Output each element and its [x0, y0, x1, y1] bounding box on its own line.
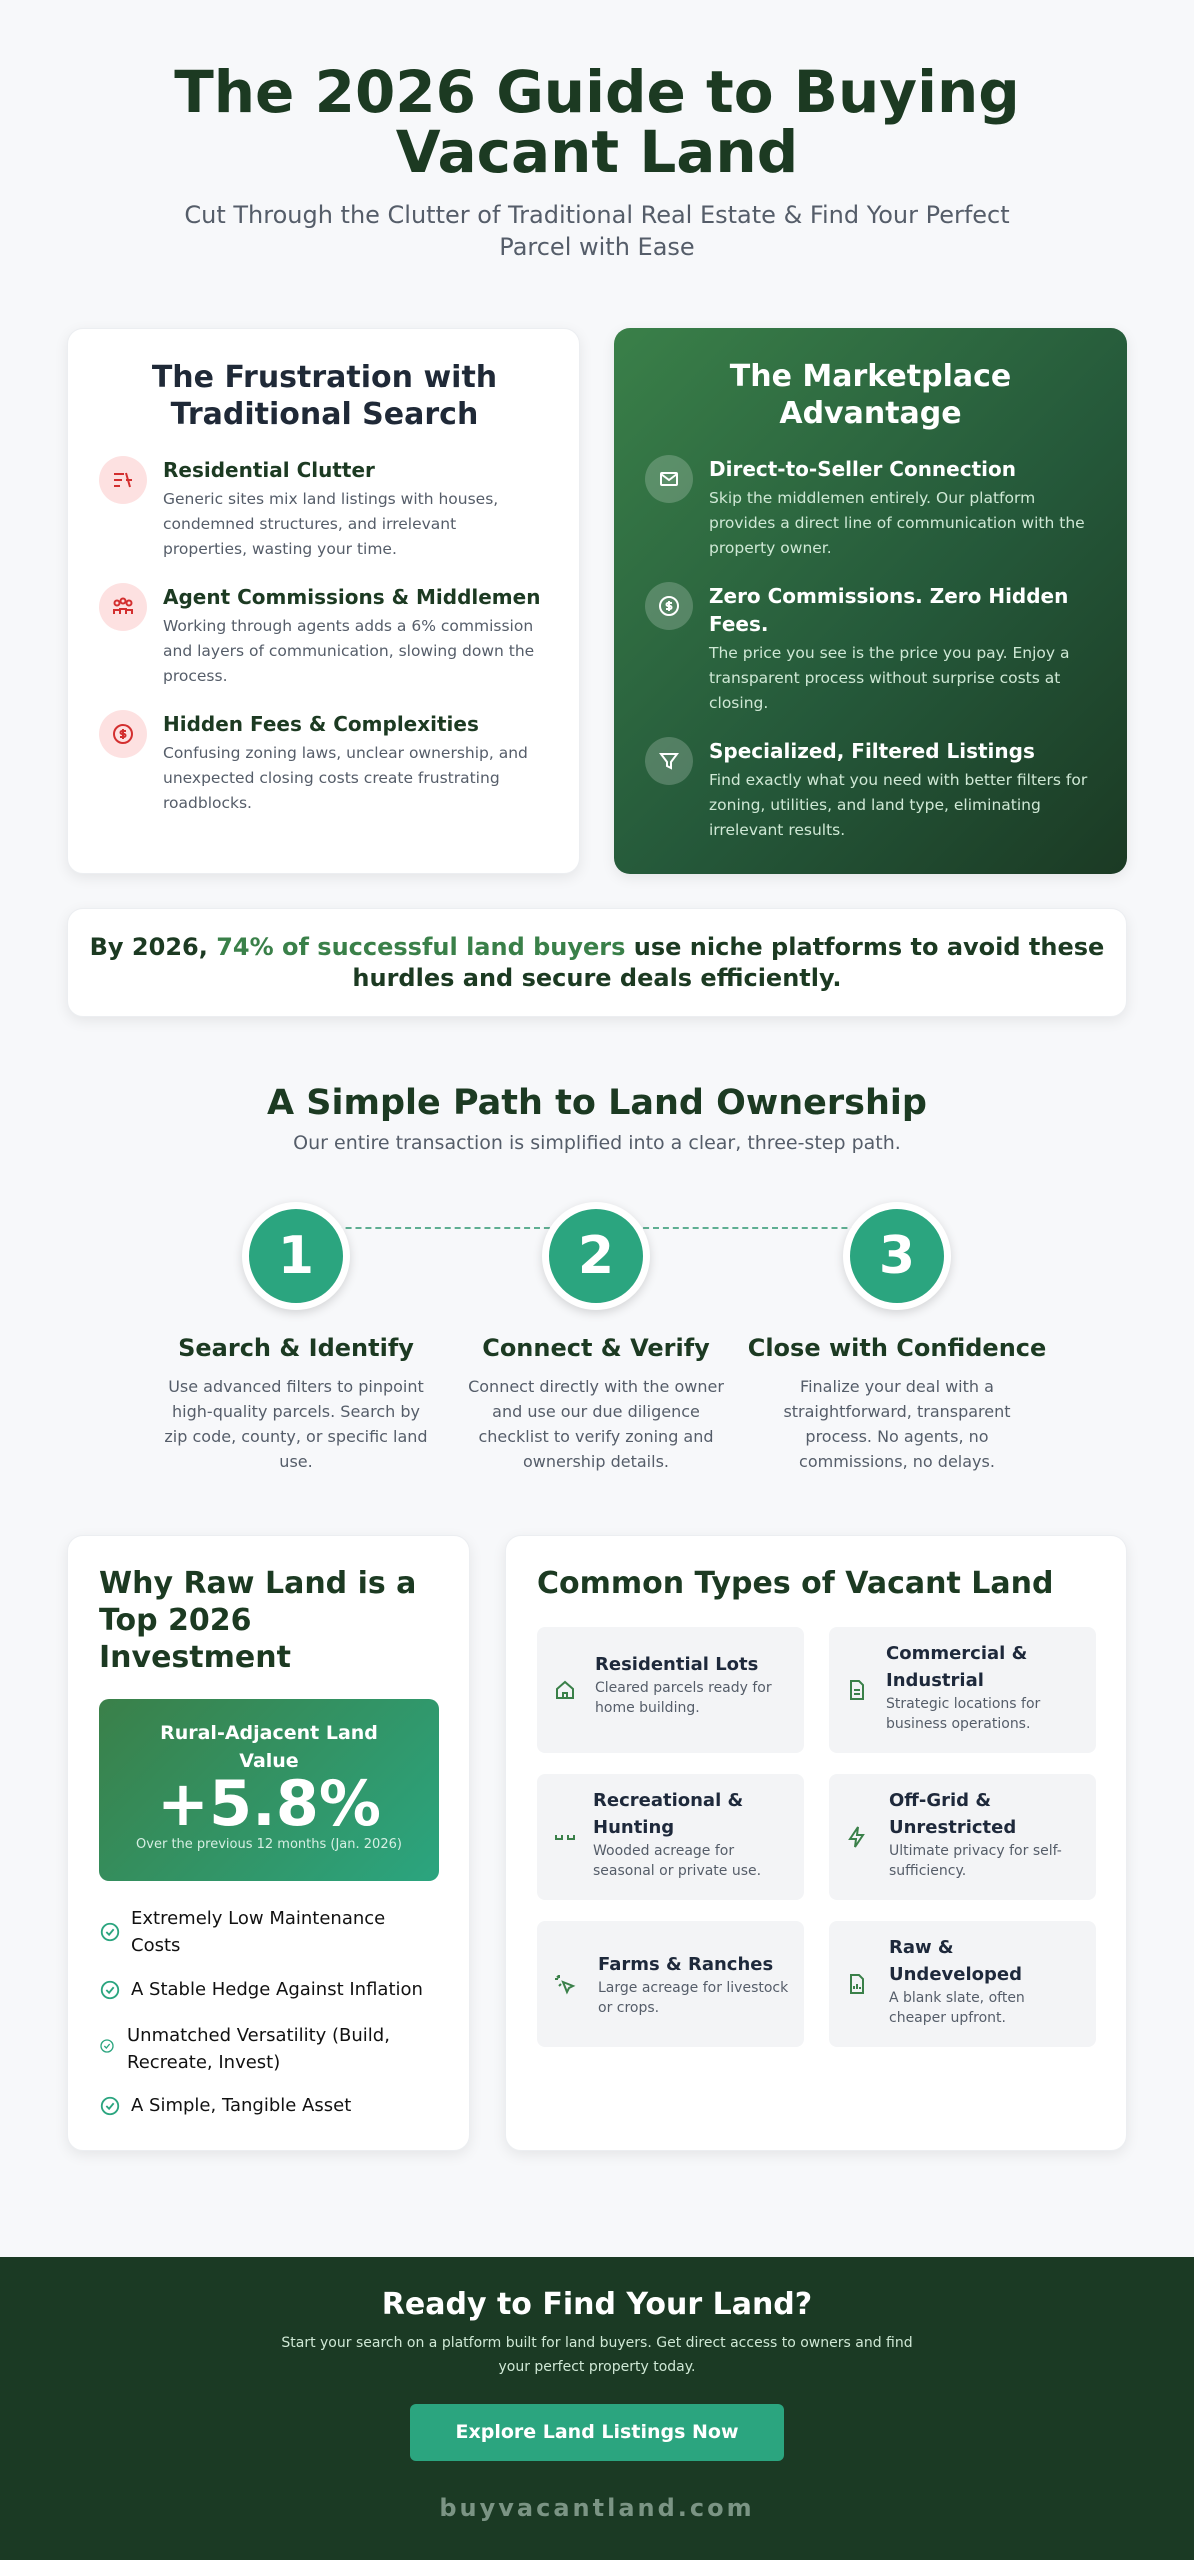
panel: marketplace advantage	[614, 328, 1127, 874]
title: The 2026 Guide to Buying	[174, 58, 1020, 126]
tile: off-grid	[829, 1774, 1096, 1900]
step 1	[164, 1202, 428, 1471]
heading: advantage: Advantage	[779, 396, 962, 431]
tile: off-grid: Unrestricted	[889, 1817, 1016, 1838]
panel: marketplace advantage: Specialized, Filtered Listings	[709, 739, 1035, 763]
text: Connect directly with the owner and use our due diligence checklist to verify zoning and ownership details.	[468, 1377, 724, 1471]
button: Explore Land Listings Now	[455, 2421, 739, 2443]
heading: advantage	[730, 359, 1011, 431]
panel: frustration: Confusing zoning laws, unclear ownership, and unexpected closing costs create frustrating roadblocks.	[163, 744, 528, 812]
callout: stat: By 2026, 74% of successful land buyers use niche platforms to avoid these hurdles and secure deals efficiently.	[90, 933, 1104, 992]
text: Finalize your deal with a straightforward, transparent process. No agents, no commissions, no delays.	[783, 1377, 1011, 1471]
tile: residential	[537, 1627, 804, 1753]
tile: commercial: business operations.	[886, 1716, 1030, 1732]
heading: frustration: Traditional Search	[171, 397, 478, 432]
stat box: +5.8%: Rural-Adjacent Land	[160, 1722, 378, 1744]
heading: advantage: The Marketplace	[730, 359, 1011, 394]
panel: marketplace advantage: Zero Commissions. Zero Hidden Fees.	[709, 584, 1068, 636]
tile: raw: Raw &	[889, 1937, 954, 1958]
text: 1	[278, 1226, 314, 1286]
item: filtered listings	[645, 737, 1088, 839]
item: residential clutter	[99, 456, 498, 558]
tile: raw: A blank slate, often	[889, 1990, 1025, 2006]
text: 3	[879, 1226, 915, 1286]
panel: frustration: Residential Clutter	[163, 458, 375, 482]
checklist: A Stable Hedge Against Inflation	[131, 1979, 423, 2000]
item: zero commissions	[645, 582, 1069, 712]
text: Use advanced filters to pinpoint high-quality parcels. Search by zip code, county, or specific land use.	[164, 1377, 428, 1471]
stat box: +5.8%	[99, 1699, 439, 1881]
tile: raw	[829, 1921, 1096, 2047]
panel: marketplace advantage: Direct-to-Seller Connection	[709, 457, 1016, 481]
title: Vacant Land	[396, 118, 798, 186]
tile: farms: Large acreage for livestock	[598, 1980, 788, 1996]
tile: farms: Farms & Ranches	[598, 1954, 773, 1975]
tile: commercial: Strategic locations for	[886, 1696, 1040, 1712]
panel: why raw land	[67, 1535, 470, 2151]
tile: residential: Cleared parcels ready for	[595, 1680, 772, 1696]
domain: buyvacantland.com	[439, 2494, 755, 2522]
panel: marketplace advantage: The price you see is the price you pay. Enjoy a transparent process without surprise costs at closing.	[709, 644, 1069, 712]
subtitle: Cut Through the Clutter of Traditional Real Estate & Find Your Perfect Parcel with Ease	[184, 201, 1010, 261]
heading: simple path: A Simple Path to Land Ownership	[267, 1083, 927, 1123]
checklist	[100, 1908, 423, 2116]
stat box: +5.8%: Over the previous 12 months (Jan. 2026)	[136, 1837, 402, 1852]
item: hidden fees	[99, 710, 528, 812]
step 3	[748, 1202, 1046, 1471]
tile: farms: or crops.	[598, 2000, 659, 2016]
callout: stat	[67, 908, 1127, 1017]
panel: common types	[505, 1535, 1127, 2151]
tile: off-grid: Ultimate privacy for self-	[889, 1843, 1062, 1859]
text: Search & Identify	[178, 1334, 414, 1362]
text: Close with Confidence	[748, 1334, 1046, 1362]
footer heading: Ready to Find Your Land?	[382, 2287, 812, 2322]
subtitle: simple path: Our entire transaction is simplified into a clear, three-step path.	[293, 1132, 901, 1154]
stat box: +5.8%: +5.8%	[157, 1767, 381, 1840]
panel: marketplace advantage: Skip the middlemen entirely. Our platform provides a direct line of communication with the property owner.	[709, 489, 1085, 557]
item: agent commissions	[99, 583, 540, 685]
text: Connect & Verify	[482, 1334, 710, 1362]
heading: common types: Common Types of Vacant Land	[537, 1566, 1053, 1601]
tile: residential: home building.	[595, 1700, 700, 1716]
panel: frustration	[67, 328, 580, 874]
step 2	[468, 1202, 724, 1471]
panel: marketplace advantage: Find exactly what you need with better filters for zoning, utilities, and land type, eliminating irrelevant results.	[709, 771, 1087, 839]
title	[174, 58, 1020, 186]
tile: recreational: Wooded acreage for	[593, 1843, 734, 1859]
tile: farms	[537, 1921, 804, 2047]
dashed connector	[296, 1227, 897, 1229]
tile: raw: Undeveloped	[889, 1964, 1022, 1985]
tile: recreational: Recreational &	[593, 1790, 743, 1811]
panel: frustration: Agent Commissions & Middlemen	[163, 585, 540, 609]
tile: recreational: seasonal or private use.	[593, 1863, 761, 1879]
tile: off-grid: sufficiency.	[889, 1863, 966, 1879]
tile: commercial: Industrial	[886, 1670, 984, 1691]
footer text: Start your search on a platform built for land buyers. Get direct access to owners and find your perfect property today.	[281, 2335, 913, 2375]
tile: residential: Residential Lots	[595, 1654, 758, 1675]
tile: raw: cheaper upfront.	[889, 2010, 1006, 2026]
item: direct-to-seller	[645, 455, 1085, 557]
panel: frustration: Working through agents adds a 6% commission and layers of communication, slowing down the process.	[163, 617, 534, 685]
heading: why raw land: Why Raw Land is a Top 2026 Investment	[99, 1566, 416, 1675]
text: 2	[578, 1226, 614, 1286]
button	[410, 2404, 784, 2461]
footer	[0, 2257, 1194, 2560]
panel: frustration: Hidden Fees & Complexities	[163, 712, 479, 736]
checklist: A Simple, Tangible Asset	[131, 2095, 351, 2116]
stat box: +5.8%: Value	[239, 1750, 299, 1772]
heading: frustration	[152, 360, 497, 432]
tile: commercial	[829, 1627, 1096, 1753]
panel: frustration: Generic sites mix land listings with houses, condemned structures, and irrelevant properties, wasting your time.	[163, 490, 498, 558]
tile: commercial: Commercial &	[886, 1643, 1027, 1664]
tile: recreational	[537, 1774, 804, 1900]
tile: recreational: Hunting	[593, 1817, 674, 1838]
tile: off-grid: Off-Grid &	[889, 1790, 991, 1811]
checklist: Extremely Low Maintenance Costs	[131, 1908, 385, 1956]
checklist: Unmatched Versatility (Build, Recreate, Invest)	[127, 2025, 390, 2073]
heading: frustration: The Frustration with	[152, 360, 497, 395]
